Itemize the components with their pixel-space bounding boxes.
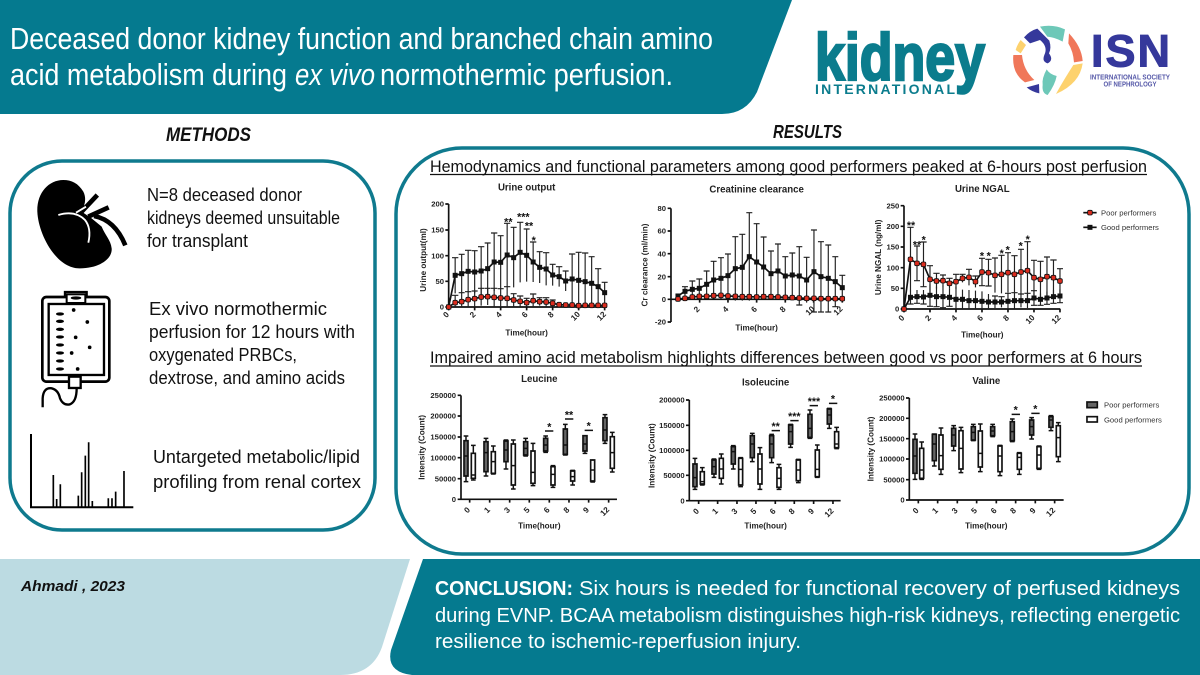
chart: creatinine clearance: -20	[655, 318, 666, 327]
text: normothermic perfusion: oxygenated PRBCs,	[149, 345, 297, 365]
logo: ISN: OF NEPHROLOGY	[1104, 82, 1157, 88]
chart: leucine: 9	[581, 505, 591, 515]
chart: urine output: Urine output(ml)	[419, 228, 428, 292]
chart: valine: 0	[900, 496, 905, 505]
title line 2: ex vivo	[295, 57, 375, 92]
logo: kidney international: INTERNATIONAL	[815, 81, 955, 97]
text: metabolic profiling: Untargeted metabolic/lipid	[153, 447, 360, 467]
citation: Ahmadi , 2023	[20, 578, 126, 595]
chart: isoleucine: 0	[691, 506, 701, 516]
logo: ISN	[1013, 26, 1170, 95]
text: normothermic perfusion: perfusion for 12 hours with	[149, 322, 355, 342]
chart: urine output: 2	[468, 310, 478, 320]
title line 2	[10, 57, 673, 92]
chart: isoleucine: 1	[710, 506, 720, 516]
chart: leucine: 150000	[430, 433, 456, 442]
chart: isoleucine	[648, 377, 841, 531]
chart: valine: 250000	[879, 394, 905, 403]
chart: creatinine clearance: 80	[657, 204, 666, 213]
chart: leucine: 5	[522, 505, 532, 515]
chart: urine NGAL: 0	[897, 313, 907, 323]
chart: urine NGAL: 250	[887, 201, 899, 210]
chart: valine: 6	[989, 506, 999, 516]
chart: urine output: ***	[517, 212, 530, 224]
chart: leucine: 8	[562, 505, 572, 515]
logo: ISN: INTERNATIONAL SOCIETY	[1090, 74, 1170, 82]
chart: creatinine clearance	[640, 185, 845, 333]
chart: valine: 8	[1008, 506, 1018, 516]
icon: mass spectrum	[30, 434, 133, 507]
chart: leucine: *	[587, 421, 592, 433]
chart: urine output: Time(hour)	[505, 329, 548, 338]
chart: urine output	[419, 183, 608, 338]
chart: leucine: 6	[542, 505, 552, 515]
chart: valine: *	[1014, 405, 1019, 417]
chart: leucine: 0	[462, 505, 472, 515]
legend: box plots: Good performers	[1104, 415, 1162, 424]
chart: urine NGAL: Urine NGAL	[955, 184, 1010, 195]
chart: urine output: 12	[595, 310, 608, 323]
chart: valine: Intensity (Count)	[867, 416, 876, 481]
chart: isoleucine: Isoleucine	[742, 377, 790, 388]
chart: valine: Time(hour)	[965, 522, 1008, 531]
chart: urine output: 50	[435, 277, 444, 286]
text: normothermic perfusion: Ex vivo normothermic	[149, 299, 327, 319]
chart: creatinine clearance: 40	[657, 249, 666, 258]
chart: creatinine clearance: 12	[832, 304, 845, 317]
legend: urine charts: Good performers	[1101, 223, 1159, 232]
chart: urine NGAL: 0	[895, 305, 899, 314]
chart: urine NGAL: Time(hour)	[961, 330, 1004, 339]
chart: valine: 5	[969, 506, 979, 516]
chart: urine NGAL: 10	[1024, 313, 1037, 326]
text: metabolic profiling: profiling from renal cortex	[153, 472, 361, 492]
chart: urine NGAL: 100	[887, 263, 899, 272]
panel: results	[396, 148, 1189, 554]
chart: leucine: Time(hour)	[518, 522, 561, 531]
chart: creatinine clearance: 60	[657, 227, 666, 236]
title line 1: Deceased donor kidney function and branched chain amino	[10, 21, 713, 56]
chart: urine output: 0	[440, 303, 444, 312]
chart: isoleucine: ***	[788, 411, 801, 423]
chart: urine output: Urine output	[498, 183, 556, 194]
legend: urine charts	[1083, 208, 1159, 232]
icon: kidney	[37, 180, 125, 268]
chart: valine	[867, 376, 1064, 531]
chart: urine output: **	[504, 216, 513, 228]
logo: ISN: ISN	[1091, 26, 1170, 76]
footer: conclusion: resilience to ischemic-reperfusion injury.	[435, 631, 801, 653]
text: metabolic profiling	[153, 447, 361, 492]
chart: urine NGAL: *	[1019, 241, 1024, 253]
chart: isoleucine: 6	[768, 506, 778, 516]
chart: isoleucine: Time(hour)	[744, 522, 787, 531]
legend: box plots	[1087, 401, 1162, 424]
chart: urine NGAL: 4	[949, 313, 959, 323]
chart: creatinine clearance: Time(hour)	[735, 324, 778, 333]
footer: conclusion: CONCLUSION:	[435, 578, 573, 600]
chart: isoleucine: 0	[680, 496, 685, 505]
chart: isoleucine: **	[771, 421, 781, 433]
text: donor kidneys: for transplant	[147, 231, 248, 251]
chart: urine output: 10	[569, 310, 582, 323]
title line 2: acid metabolism during	[10, 57, 287, 92]
chart: leucine: 12	[598, 505, 612, 518]
chart: urine NGAL: **	[913, 239, 922, 251]
chart: creatinine clearance: 4	[721, 304, 731, 314]
chart: urine NGAL: 50	[891, 284, 899, 293]
chart: leucine: 0	[452, 495, 456, 504]
chart: isoleucine: 9	[806, 506, 816, 516]
chart: valine: 100000	[879, 455, 905, 464]
chart: creatinine clearance: Cr clearance (ml/min)	[640, 223, 649, 306]
chart: valine: *	[1033, 404, 1038, 416]
chart: isoleucine: 5	[749, 506, 759, 516]
chart: isoleucine: 8	[787, 506, 797, 516]
chart: leucine	[418, 374, 617, 531]
chart: urine NGAL: *	[1000, 248, 1005, 260]
chart: isoleucine: 200000	[659, 396, 685, 405]
chart: urine output: 0	[441, 310, 451, 320]
footer: citation band	[0, 559, 410, 675]
heading: hemodynamics: Hemodynamics and functional parameters among good performers peaked at 6-hours post perfusion	[430, 157, 1147, 176]
chart: urine output: 8	[546, 310, 556, 320]
footer: conclusion: during EVNP. BCAA metabolism distinguishes high-risk kidneys, reflecting energetic	[435, 605, 1180, 627]
logo: kidney international: kidney	[815, 20, 985, 94]
chart: isoleucine: Intensity (Count)	[648, 423, 657, 488]
chart: valine: 3	[950, 506, 960, 516]
chart: creatinine clearance: 6	[749, 304, 759, 314]
chart: urine NGAL: *	[980, 251, 985, 263]
title line 2: normothermic perfusion.	[380, 57, 673, 92]
chart: isoleucine: 50000	[663, 471, 685, 480]
chart: urine NGAL: 12	[1050, 313, 1063, 326]
text: donor kidneys: kidneys deemed unsuitable	[147, 208, 340, 228]
chart: urine NGAL: 8	[1001, 313, 1011, 323]
text: normothermic perfusion	[149, 299, 355, 388]
footer: conclusion: Six hours is needed for functional recovery of perfused kidneys	[579, 578, 1180, 600]
chart: urine output: 100	[431, 251, 444, 260]
chart: creatinine clearance: 20	[657, 272, 666, 281]
chart: leucine: 3	[502, 505, 512, 515]
chart: valine: 150000	[879, 434, 905, 443]
panel: methods	[10, 161, 375, 530]
chart: urine NGAL: Urine NGAL (ng/ml)	[874, 219, 883, 295]
chart: valine: 1	[930, 506, 940, 516]
chart: urine NGAL: *	[922, 234, 927, 246]
chart: creatinine clearance: 8	[778, 304, 788, 314]
chart: leucine: Intensity (Count)	[418, 415, 427, 480]
chart: creatinine clearance: 2	[692, 304, 702, 314]
title banner	[0, 0, 792, 114]
chart: urine output: 6	[520, 310, 530, 320]
chart: leucine: 50000	[435, 474, 456, 483]
chart: valine: 9	[1028, 506, 1038, 516]
chart: urine output: 150	[431, 226, 444, 235]
legend: box plots: Poor performers	[1104, 401, 1159, 410]
chart: creatinine clearance: 0	[662, 295, 666, 304]
chart: valine: 12	[1044, 506, 1058, 519]
chart: urine NGAL: 150	[887, 243, 899, 252]
chart: urine NGAL: 6	[975, 313, 985, 323]
chart: urine NGAL: *	[1026, 234, 1031, 246]
chart: isoleucine: 12	[823, 506, 836, 519]
chart: creatinine clearance: Creatinine clearance	[709, 185, 804, 196]
chart: leucine: Leucine	[521, 374, 558, 385]
chart: urine NGAL: 200	[887, 222, 899, 231]
chart: isoleucine: *	[831, 394, 836, 406]
heading: methods: METHODS	[166, 125, 251, 146]
chart: valine: 50000	[883, 475, 905, 484]
chart: urine output: 4	[494, 310, 504, 320]
chart: isoleucine: 100000	[659, 446, 685, 455]
chart: leucine: 200000	[430, 412, 456, 421]
chart: isoleucine: 3	[730, 506, 740, 516]
chart: leucine: 250000	[430, 391, 456, 400]
chart: urine NGAL: *	[1006, 244, 1011, 256]
chart: leucine: 100000	[430, 453, 456, 462]
chart: isoleucine: 150000	[659, 421, 685, 430]
text: donor kidneys	[147, 185, 340, 251]
chart: isoleucine: ***	[808, 396, 821, 408]
legend: urine charts: Poor performers	[1101, 208, 1156, 217]
footer: conclusion	[390, 559, 1200, 675]
chart: urine NGAL: *	[987, 251, 992, 263]
chart: valine: Valine	[972, 376, 1001, 387]
chart: valine: 200000	[879, 414, 905, 423]
chart: valine: 0	[911, 506, 921, 516]
icon: perfusion bag	[42, 292, 109, 407]
heading: results: RESULTS	[773, 122, 842, 142]
text: donor kidneys: N=8 deceased donor	[147, 185, 302, 205]
heading: amino acid metabolism: Impaired amino acid metabolism highlights differences between good vs poor performers at 6 hours	[430, 348, 1142, 367]
chart: leucine: 1	[482, 505, 492, 515]
chart: urine output: 200	[431, 200, 444, 209]
chart: leucine: *	[547, 421, 552, 433]
text: normothermic perfusion: dextrose, and amino acids	[149, 368, 345, 388]
chart: urine NGAL: **	[907, 220, 916, 232]
chart: creatinine clearance: 10	[804, 304, 817, 317]
chart: urine NGAL	[874, 184, 1063, 339]
chart: urine output: **	[525, 221, 534, 233]
chart: urine output: *	[532, 235, 537, 247]
chart: urine NGAL: 2	[923, 313, 933, 323]
chart: leucine: **	[565, 409, 574, 421]
